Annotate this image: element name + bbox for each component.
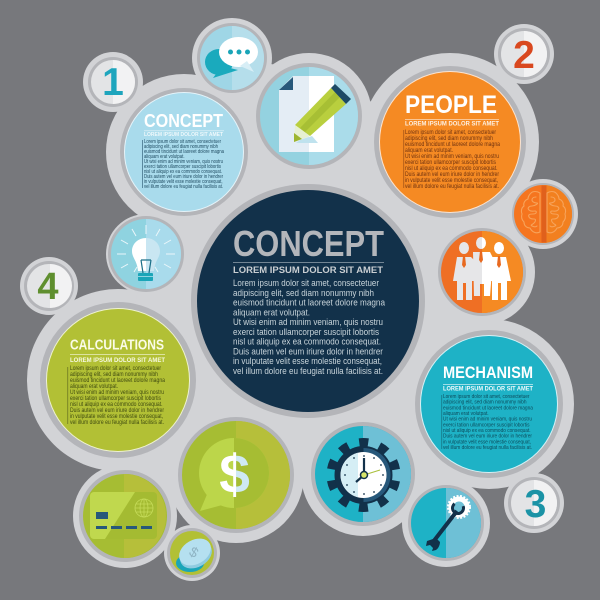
body text: aliquam erat volutpat. [70,384,118,390]
body text: nisl ut aliquip ex ea commodo consequat. [233,336,381,348]
body text: Duis autem vel eum iriure dolor in hendrer [144,174,223,180]
number badge 1 [88,57,138,107]
body text: vel illum dolore eu feugiat nulla facilisis at. [443,445,532,451]
body text: nisl ut aliquip ex ea commodo consequat. [443,428,531,434]
body text: Ut wisi enim ad minim veniam, quis nostru [443,417,532,423]
body text: in vulputate velit esse molestie consequat, [144,179,222,185]
body text: exerci tation ullamcorper suscipit lobortis [144,164,221,170]
body text: Ut wisi enim ad minim veniam, quis nostru [233,317,383,328]
number badge 2: 2 [513,34,535,77]
subheading: LOREM IPSUM DOLOR SIT AMET [443,386,533,392]
body text: adipiscing elit, sed diam nonummy nibh [405,136,493,142]
body text: Duis autem vel eum iriure dolor in hendrer [405,172,499,178]
body text: vel illum dolore eu feugiat nulla facilisis at. [144,184,223,190]
number badge 3: 3 [525,483,546,526]
body text: Lorem ipsum dolor sit amet, consectetuer [443,394,530,400]
body text: vel illum dolore eu feugiat nulla facilisis at. [405,184,499,190]
body text: vel illum dolore eu feugiat nulla facilisis at. [233,366,383,377]
icon: clock gear [311,422,415,526]
subheading: LOREM IPSUM DOLOR SIT AMET [233,265,383,276]
icon: business people [438,228,526,316]
body text [144,139,224,190]
body text: vel illum dolore eu feugiat nulla facilisis at. [70,420,164,426]
panel: concept [120,88,248,216]
body text: euismod tincidunt ut laoreet dolore magna [233,298,386,308]
icon: light bulb [108,216,184,292]
heading: CONCEPT [144,111,223,131]
body text [70,366,166,426]
body text: in vulputate velit esse molestie consequat, [233,356,382,367]
body text [443,394,534,451]
panel: people [374,66,526,218]
body text: exerci tation ullamcorper suscipit lobortis [70,396,161,402]
body text: nisl ut aliquip ex ea commodo consequat. [405,166,498,172]
body text: adipiscing elit, sed diam nonummy nibh [144,144,218,150]
body text: exerci tation ullamcorper suscipit lobortis [233,327,379,338]
icon: dollar bubble [178,417,294,533]
number badge 4: 4 [37,266,59,308]
body text: Duis autem vel eum iriure dolor in hendrer [443,434,532,440]
body text: Ut wisi enim ad minim veniam, quis nostru [144,159,223,165]
body text: aliquam erat volutpat. [144,154,184,160]
body text: Duis autem vel eum iriure dolor in hendrer [70,408,164,414]
heading: concept: CONCEPT [233,223,384,264]
subheading: LOREM IPSUM DOLOR SIT AMET [405,120,499,128]
number badge 2 [498,28,550,80]
icon: dollar bubble: $ [219,443,250,505]
panel: calculations [40,302,196,458]
body text: Lorem ipsum dolor sit amet, consectetuer [405,130,496,136]
body text: euismod tincidunt ut laoreet dolore magna [405,142,501,148]
body text: exerci tation ullamcorper suscipit lobortis [443,422,530,428]
body text: euismod tincidunt ut laoreet dolore magna [70,378,166,384]
body text: exerci tation ullamcorper suscipit lobortis [405,160,496,166]
body text: nisl ut aliquip ex ea commodo consequat. [70,402,163,408]
subheading: LOREM IPSUM DOLOR SIT AMET [70,357,165,364]
body text: Lorem ipsum dolor sit amet, consectetuer [70,366,161,372]
body text: in vulputate velit esse molestie consequat, [405,178,498,184]
body text [233,278,386,377]
icon: document and pencil [256,63,362,169]
body text: Duis autem vel eum iriure dolor in hendrer [233,346,384,357]
subheading: LOREM IPSUM DOLOR SIT AMET [144,132,224,138]
body text: in vulputate velit esse molestie consequat, [70,414,163,420]
icon: brain [512,183,574,245]
heading: MECHANISM [443,364,533,382]
body text: aliquam erat volutpat. [443,411,489,417]
panel: mechanism [415,330,563,478]
body text: Lorem ipsum dolor sit amet, consectetuer [233,278,380,289]
body text: adipiscing elit, sed diam nonummy nibh [233,288,374,299]
number badge 3 [508,477,560,529]
icon: credit card [79,470,171,562]
icon: coin: $ [187,543,202,561]
icon: coin [167,528,217,578]
body text: nisl ut aliquip ex ea commodo consequat. [144,169,222,175]
body text: adipiscing elit, sed diam nonummy nibh [70,372,158,378]
number badge 4 [24,261,74,311]
number badge 1: 1 [102,61,124,104]
body text: in vulputate velit esse molestie consequat, [443,439,531,445]
body text: aliquam erat volutpat. [405,148,453,154]
body text: aliquam erat volutpat. [233,307,310,318]
icon: speech bubbles [197,23,267,93]
body text: euismod tincidunt ut laoreet dolore magna [443,405,534,411]
body text: Ut wisi enim ad minim veniam, quis nostru [70,390,164,396]
heading: PEOPLE [405,91,497,119]
icon: wrench and cog [408,485,484,561]
panel: central concept [191,184,425,418]
body text [405,130,501,190]
body text: Lorem ipsum dolor sit amet, consectetuer [144,139,221,145]
body text: Ut wisi enim ad minim veniam, quis nostru [405,154,499,160]
heading: CALCULATIONS [70,338,164,354]
body text: adipiscing elit, sed diam nonummy nibh [443,400,526,406]
body text: euismod tincidunt ut laoreet dolore magna [144,149,224,155]
